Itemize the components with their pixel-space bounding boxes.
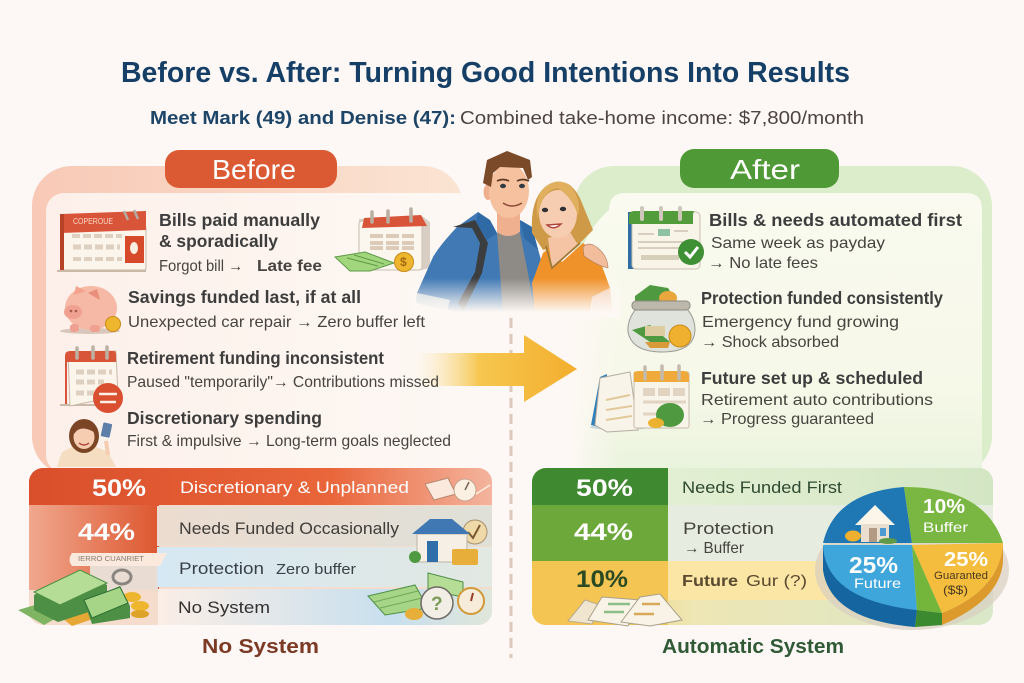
icon: calendar with checkmark bbox=[628, 208, 704, 269]
icon: calendar with cash and coin: $ bbox=[400, 255, 407, 269]
text: savings funded last: Savings funded last, if at all bbox=[128, 287, 361, 307]
row label: future: Future bbox=[682, 573, 738, 590]
text: discretionary spending bbox=[127, 408, 451, 450]
text: bills paid manually: Bills paid manually bbox=[159, 210, 320, 230]
panel: before allocation table bbox=[18, 468, 492, 626]
icon: calendar with stop badge bbox=[60, 347, 123, 413]
pie label: 25 percent guaranteed: Guaranted bbox=[934, 570, 988, 582]
stat: 50 percent: 50% bbox=[92, 475, 146, 502]
icon: house and coins bbox=[409, 519, 487, 565]
pie label: 25 percent future bbox=[849, 552, 901, 591]
text: bills and needs automated: Same week as payday bbox=[711, 235, 885, 252]
tag: zero buffer ribbon bbox=[70, 553, 167, 566]
pie label: 25 percent guaranteed: ($$) bbox=[943, 583, 968, 597]
row label: protection buffer bbox=[683, 519, 774, 557]
heading: before: Before bbox=[212, 154, 296, 185]
text: retirement detail: Paused "temporarily"→ Contributions missed bbox=[127, 374, 439, 391]
text: bills paid manually: & sporadically bbox=[159, 231, 278, 251]
text: future set up: Retirement auto contributions bbox=[701, 392, 933, 409]
panel: after allocation table bbox=[532, 468, 1009, 630]
row label: discretionary: Discretionary & Unplanned bbox=[180, 478, 409, 497]
subtitle bbox=[150, 108, 864, 128]
pie label: 25 percent guaranteed bbox=[934, 549, 988, 597]
icon: cash, question coin and clock bbox=[368, 573, 484, 620]
pie label: 25 percent future: 25% bbox=[849, 552, 898, 578]
icon: cash pile and coins bbox=[18, 570, 149, 626]
row label: protection: Protection bbox=[179, 559, 264, 578]
text: discretionary spending: First & impulsive → Long-term goals neglected bbox=[127, 433, 451, 450]
pie label: 10 percent buffer bbox=[923, 496, 968, 535]
divider: dashed center line bbox=[510, 318, 512, 658]
row label: protection buffer: → Buffer bbox=[684, 540, 745, 557]
icon: papers bbox=[568, 594, 682, 626]
heading: after bbox=[680, 149, 839, 188]
illustration: couple Mark and Denise bbox=[410, 151, 620, 318]
chart: budget pie bbox=[815, 487, 1009, 630]
woman bbox=[532, 181, 613, 317]
icon: documents and calendar bbox=[590, 366, 689, 432]
text: future set up: Future set up & scheduled bbox=[701, 368, 923, 388]
row label: protection bbox=[179, 559, 356, 578]
row label: future: Gur (?) bbox=[746, 573, 807, 590]
caption: automatic system: Automatic System bbox=[662, 636, 844, 658]
row label: needs: Needs Funded Occasionally bbox=[179, 519, 400, 538]
subtitle: Meet Mark (49) and Denise (47): bbox=[150, 108, 456, 128]
icon: house in pie bbox=[845, 505, 897, 544]
title: Before vs. After: Turning Good Intentions Into Results bbox=[121, 57, 850, 89]
icon: cash, question coin and clock: ? bbox=[431, 594, 443, 615]
stat: 10 percent: 10% bbox=[576, 566, 628, 593]
row label: future bbox=[682, 573, 807, 590]
icon: calendar with cash and coin bbox=[335, 209, 430, 272]
icon: overdue calendar bbox=[57, 210, 146, 271]
tag: zero buffer ribbon: IERRO CUANRIET bbox=[78, 556, 145, 563]
text: bills paid manually: Late fee bbox=[257, 258, 322, 275]
row label: needs funded first: Needs Funded First bbox=[682, 478, 842, 497]
stat: 44 percent: 44% bbox=[574, 519, 633, 546]
stat: 44 percent: 44% bbox=[78, 519, 135, 546]
panel: after bbox=[570, 149, 992, 476]
icon: piggy bank bbox=[60, 286, 120, 334]
text: savings detail: Unexpected car repair → Zero buffer left bbox=[128, 314, 426, 331]
text: bills and needs automated bbox=[708, 210, 962, 272]
row label: protection: Zero buffer bbox=[276, 561, 356, 578]
text: bills paid manually: Forgot bill → bbox=[159, 258, 243, 275]
man bbox=[416, 151, 541, 314]
text: bills paid manually bbox=[159, 210, 322, 275]
stat: 50 percent: 50% bbox=[576, 475, 633, 502]
text: discretionary spending: Discretionary spending bbox=[127, 408, 322, 428]
arrow: before to after bbox=[415, 335, 577, 402]
caption: no system: No System bbox=[202, 636, 319, 658]
text: protection funded: Protection funded consistently bbox=[701, 288, 943, 308]
text: future set up: → Progress guaranteed bbox=[700, 411, 874, 428]
text: retirement funding: Retirement funding inconsistent bbox=[127, 348, 384, 368]
pie label: 10 percent buffer: Buffer bbox=[923, 519, 968, 535]
icon: card and clock bbox=[425, 478, 490, 501]
pie label: 25 percent guaranteed: 25% bbox=[944, 549, 988, 571]
icon: savings jar bbox=[628, 285, 695, 352]
text: future set up bbox=[700, 368, 933, 428]
text: protection funded: Emergency fund growing bbox=[702, 314, 899, 331]
text: protection funded bbox=[701, 288, 943, 351]
subtitle: Combined take-home income: $7,800/month bbox=[460, 108, 864, 128]
pie label: 10 percent buffer: 10% bbox=[923, 496, 965, 518]
heading: after: After bbox=[730, 154, 800, 185]
text: protection funded: → Shock absorbed bbox=[701, 334, 839, 351]
panel: before bbox=[32, 150, 476, 476]
icon: woman with card bbox=[57, 419, 116, 467]
pie label: 25 percent future: Future bbox=[854, 575, 901, 591]
heading: before bbox=[165, 150, 337, 188]
text: bills and needs automated: → No late fees bbox=[708, 255, 818, 272]
row label: no system: No System bbox=[178, 598, 270, 617]
text: bills and needs automated: Bills & needs automated first bbox=[709, 210, 962, 230]
row label: protection buffer: Protection bbox=[683, 519, 774, 538]
icon: overdue calendar: COPEROUE bbox=[73, 217, 113, 226]
